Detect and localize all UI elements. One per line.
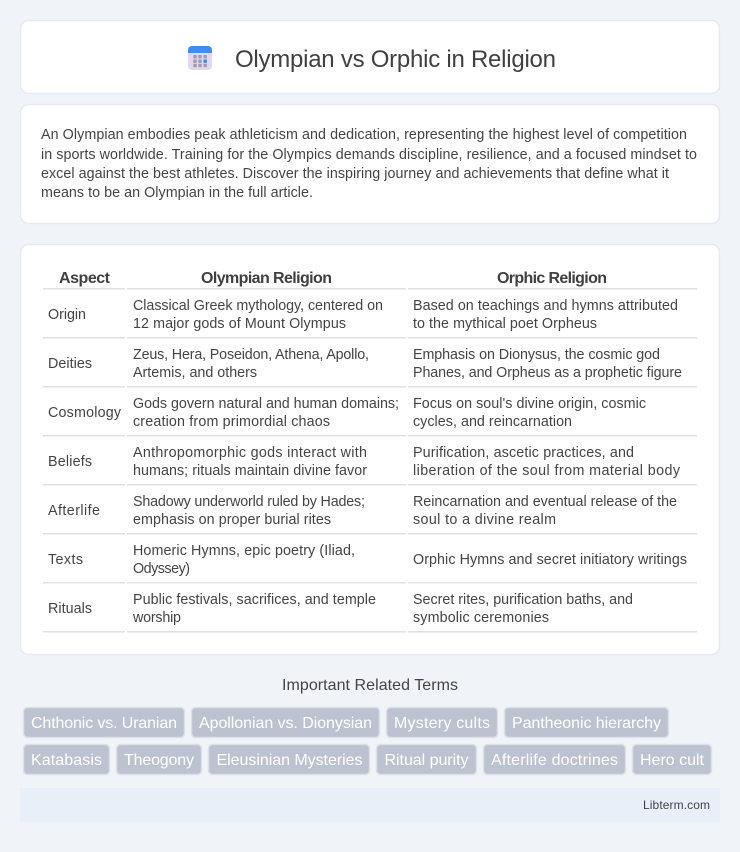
row: texts: Texts bbox=[48, 552, 83, 568]
row: origin: Based on teachings and hymns attributed bbox=[413, 298, 678, 314]
row: origin: Origin bbox=[48, 307, 86, 323]
tag: Apollonian vs. Dionysian bbox=[199, 715, 372, 732]
intro text: means to be an Olympian in the full article. bbox=[41, 185, 313, 201]
row: texts bbox=[48, 543, 687, 577]
row: rituals: Public festivals, sacrifices, and temple bbox=[133, 592, 376, 608]
heading: important related terms: Important Related Terms bbox=[282, 677, 458, 694]
row: deities: Artemis, and others bbox=[133, 365, 257, 381]
tag: Theogony bbox=[124, 752, 194, 769]
row: rituals: Rituals bbox=[48, 601, 92, 617]
row: origin: to the mythical poet Orpheus bbox=[413, 316, 597, 332]
tag bbox=[376, 744, 476, 774]
tag: Hero cult bbox=[640, 752, 705, 769]
row: beliefs bbox=[48, 445, 681, 479]
row: rituals bbox=[48, 592, 633, 626]
tag: Eleusinian Mysteries bbox=[216, 752, 362, 769]
title: Olympian vs Orphic in Religion bbox=[235, 46, 556, 73]
intro text: in sports worldwide. Training for the Olympics demands discipline, resilience, and a focused mindset to bbox=[41, 147, 697, 163]
tag: Mystery cults bbox=[394, 715, 490, 732]
footer bar bbox=[20, 788, 720, 822]
row: origin: Classical Greek mythology, centered on bbox=[133, 298, 383, 314]
row: texts: Orphic Hymns and secret initiatory writings bbox=[413, 552, 687, 568]
row: afterlife: soul to a divine realm bbox=[413, 512, 556, 528]
row: afterlife: Afterlife bbox=[48, 503, 100, 519]
tag bbox=[192, 708, 380, 738]
tag: Katabasis bbox=[31, 752, 102, 769]
row: rituals: worship bbox=[132, 610, 181, 626]
row: cosmology: Gods govern natural and human domains; bbox=[133, 396, 399, 412]
row: cosmology bbox=[48, 396, 646, 430]
row: afterlife: emphasis on proper burial rites bbox=[133, 512, 331, 528]
tag: Afterlife doctrines bbox=[491, 752, 618, 769]
panel: header bbox=[20, 20, 720, 94]
row: beliefs: humans; rituals maintain divine favor bbox=[133, 463, 367, 479]
tag bbox=[484, 744, 626, 774]
row: beliefs: Purification, ascetic practices, and bbox=[413, 445, 634, 461]
tag bbox=[504, 708, 668, 738]
tag bbox=[24, 744, 110, 774]
tag bbox=[208, 744, 370, 774]
intro text bbox=[41, 127, 697, 201]
intro text: excel against the best athletes. Discover the inspiring journey and achievements that define what it bbox=[41, 166, 669, 182]
tag: Ritual purity bbox=[384, 752, 468, 769]
row: afterlife: Shadowy underworld ruled by Hades; bbox=[133, 494, 365, 510]
row: deities: Zeus, Hera, Poseidon, Athena, Apollo, bbox=[133, 347, 369, 363]
row: beliefs: liberation of the soul from material body bbox=[413, 463, 681, 479]
tag bbox=[386, 708, 498, 738]
row: cosmology: cycles, and reincarnation bbox=[413, 414, 572, 430]
row: cosmology: creation from primordial chaos bbox=[133, 414, 330, 430]
row: origin bbox=[48, 298, 678, 332]
row: texts: Odyssey) bbox=[133, 561, 190, 577]
table header row bbox=[59, 270, 607, 287]
intro text: An Olympian embodies peak athleticism and dedication, representing the highest level of competition bbox=[41, 127, 687, 143]
icon: calendar grid bbox=[188, 46, 212, 70]
row: deities: Phanes, and Orpheus as a prophetic figure bbox=[413, 365, 682, 381]
table header row: Aspect bbox=[59, 270, 111, 287]
row: origin: 12 major gods of Mount Olympus bbox=[133, 316, 346, 332]
tag bbox=[24, 708, 184, 738]
row: cosmology: Cosmology bbox=[48, 405, 122, 421]
panel: introduction bbox=[20, 104, 720, 224]
row: afterlife: Reincarnation and eventual release of the bbox=[413, 494, 677, 510]
tag: Pantheonic hierarchy bbox=[512, 715, 661, 732]
row: rituals: Secret rites, purification baths, and bbox=[413, 592, 633, 608]
row: rituals: symbolic ceremonies bbox=[413, 610, 549, 626]
row: cosmology: Focus on soul's divine origin, cosmic bbox=[413, 396, 646, 412]
tag bbox=[116, 744, 202, 774]
tag bbox=[632, 744, 712, 774]
panel: comparison table bbox=[20, 244, 720, 654]
row: deities bbox=[48, 347, 682, 381]
table header row: Olympian Religion bbox=[201, 270, 332, 287]
row: beliefs: Beliefs bbox=[48, 454, 92, 470]
table header row: Orphic Religion bbox=[497, 270, 607, 287]
related term tags bbox=[24, 708, 712, 774]
tag: Chthonic vs. Uranian bbox=[31, 715, 177, 732]
footer credit: Libterm.com bbox=[643, 798, 710, 812]
row: deities: Deities bbox=[48, 356, 92, 372]
row: deities: Emphasis on Dionysus, the cosmic god bbox=[413, 347, 660, 363]
row: afterlife bbox=[48, 494, 677, 528]
row: texts: Homeric Hymns, epic poetry (Iliad, bbox=[133, 543, 355, 559]
row: beliefs: Anthropomorphic gods interact with bbox=[133, 445, 367, 461]
